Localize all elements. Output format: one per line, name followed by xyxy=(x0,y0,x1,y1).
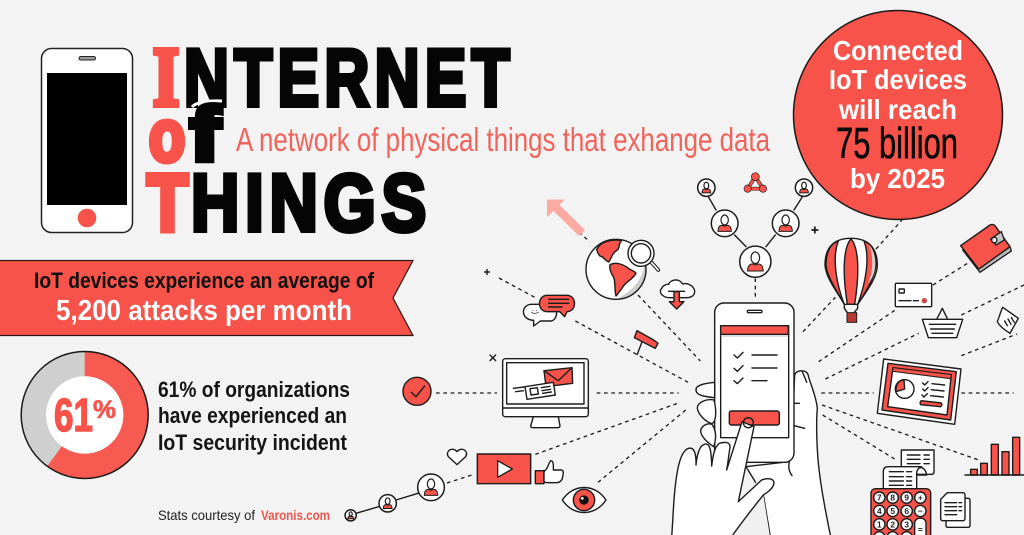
icon: chat bubbles: :) xyxy=(531,309,540,315)
title: Internet of Things: I xyxy=(153,31,179,124)
icon: hot air balloon xyxy=(812,227,877,322)
donut chart: 61% xyxy=(21,352,148,478)
icon: bar chart xyxy=(965,437,1024,475)
right hand creases xyxy=(789,371,807,476)
phone body xyxy=(715,303,794,462)
icon: calculator with receipts: 7 xyxy=(877,493,882,503)
source credit: Varonis.com xyxy=(261,507,330,523)
icon: documents xyxy=(941,493,970,527)
icon: calculator with receipts: 3 xyxy=(904,519,909,529)
text: security incident stat: IoT security incident xyxy=(158,430,348,455)
checklist xyxy=(734,352,777,384)
icon: calculator with receipts: 9 xyxy=(904,493,909,503)
icon: calculator with receipts: − xyxy=(918,506,923,516)
callout: 75 billion devices: by 2025 xyxy=(850,163,945,194)
icon: chat bubbles xyxy=(523,295,574,326)
icon: eye xyxy=(562,487,606,512)
icon: shopping basket xyxy=(922,308,963,338)
banner: attacks per month: 5,200 attacks per month xyxy=(56,295,352,327)
icon: cloud download xyxy=(660,280,695,309)
title: Internet of Things: NTERNET xyxy=(184,34,515,124)
screen shadow xyxy=(721,334,788,337)
icon: user chain xyxy=(345,474,444,521)
title: Internet of Things: T xyxy=(147,158,188,248)
donut chart: 61%: 61 xyxy=(54,389,93,441)
action button xyxy=(729,411,779,425)
phone screen xyxy=(721,326,789,438)
banner: attacks per month: IoT devices experience an average of xyxy=(34,268,375,293)
icon: calculator with receipts: 8 xyxy=(890,493,895,503)
icon: user network xyxy=(698,173,817,277)
callout: 75 billion devices: 75 billion xyxy=(836,119,958,168)
icon: small plus mark xyxy=(484,269,490,275)
icon: torn note xyxy=(997,307,1018,333)
fingertip xyxy=(743,418,753,428)
icon: heart xyxy=(447,449,467,465)
title: Internet of Things: f xyxy=(190,92,221,177)
icon: globe with magnifier xyxy=(586,239,658,299)
icon: tablet dashboard xyxy=(877,359,961,424)
icon: video play xyxy=(477,454,531,484)
title: Internet of Things: o xyxy=(149,97,185,177)
arrow: pink pointer xyxy=(547,200,585,236)
dashed connector lines xyxy=(436,220,1024,483)
source credit: Stats courtesy of xyxy=(158,507,255,523)
icon: calculator with receipts: 4 xyxy=(877,506,882,516)
donut chart: 61%: % xyxy=(93,396,116,424)
phone speaker xyxy=(747,310,762,313)
icon: credit card xyxy=(895,283,932,307)
right hand xyxy=(746,371,831,535)
text: security incident stat: 61% of organizations xyxy=(158,377,350,402)
callout: 75 billion devices: IoT devices xyxy=(829,64,967,95)
tagline: A network of physical things that exhange data xyxy=(236,121,771,158)
callout: 75 billion devices: Connected xyxy=(833,35,963,66)
callout: 75 billion devices xyxy=(794,10,1002,220)
callout: 75 billion devices: will reach xyxy=(838,94,957,125)
left fingers xyxy=(696,382,716,447)
screen header xyxy=(721,326,788,334)
icon: calculator with receipts: 2 xyxy=(890,519,895,529)
text: security incident stat xyxy=(158,377,350,455)
icon: signpost xyxy=(634,331,658,355)
icon: desktop monitor with mail xyxy=(490,355,588,428)
title: Internet of Things: HINGS xyxy=(191,158,432,248)
icon: hands holding phone xyxy=(672,303,831,535)
icon: calculator with receipts: 1 xyxy=(877,519,882,529)
icon: thumbs up xyxy=(535,461,563,484)
text: security incident stat: have experienced an xyxy=(158,403,347,428)
icon: calculator with receipts: 5 xyxy=(890,506,895,516)
gap between the hands xyxy=(738,467,773,535)
left palm xyxy=(672,422,774,535)
icon: wallet xyxy=(961,224,1011,272)
title: Internet of Things xyxy=(147,31,515,248)
icon: smartphone xyxy=(42,48,132,232)
icon: calculator with receipts: + xyxy=(918,493,923,503)
banner: attacks per month xyxy=(0,260,413,336)
icon: calculator with receipts xyxy=(871,450,934,535)
icon: calculator with receipts: = xyxy=(918,525,923,535)
icon: calculator with receipts: 6 xyxy=(904,506,909,516)
icon: check badge xyxy=(403,377,431,405)
source credit xyxy=(158,507,330,523)
